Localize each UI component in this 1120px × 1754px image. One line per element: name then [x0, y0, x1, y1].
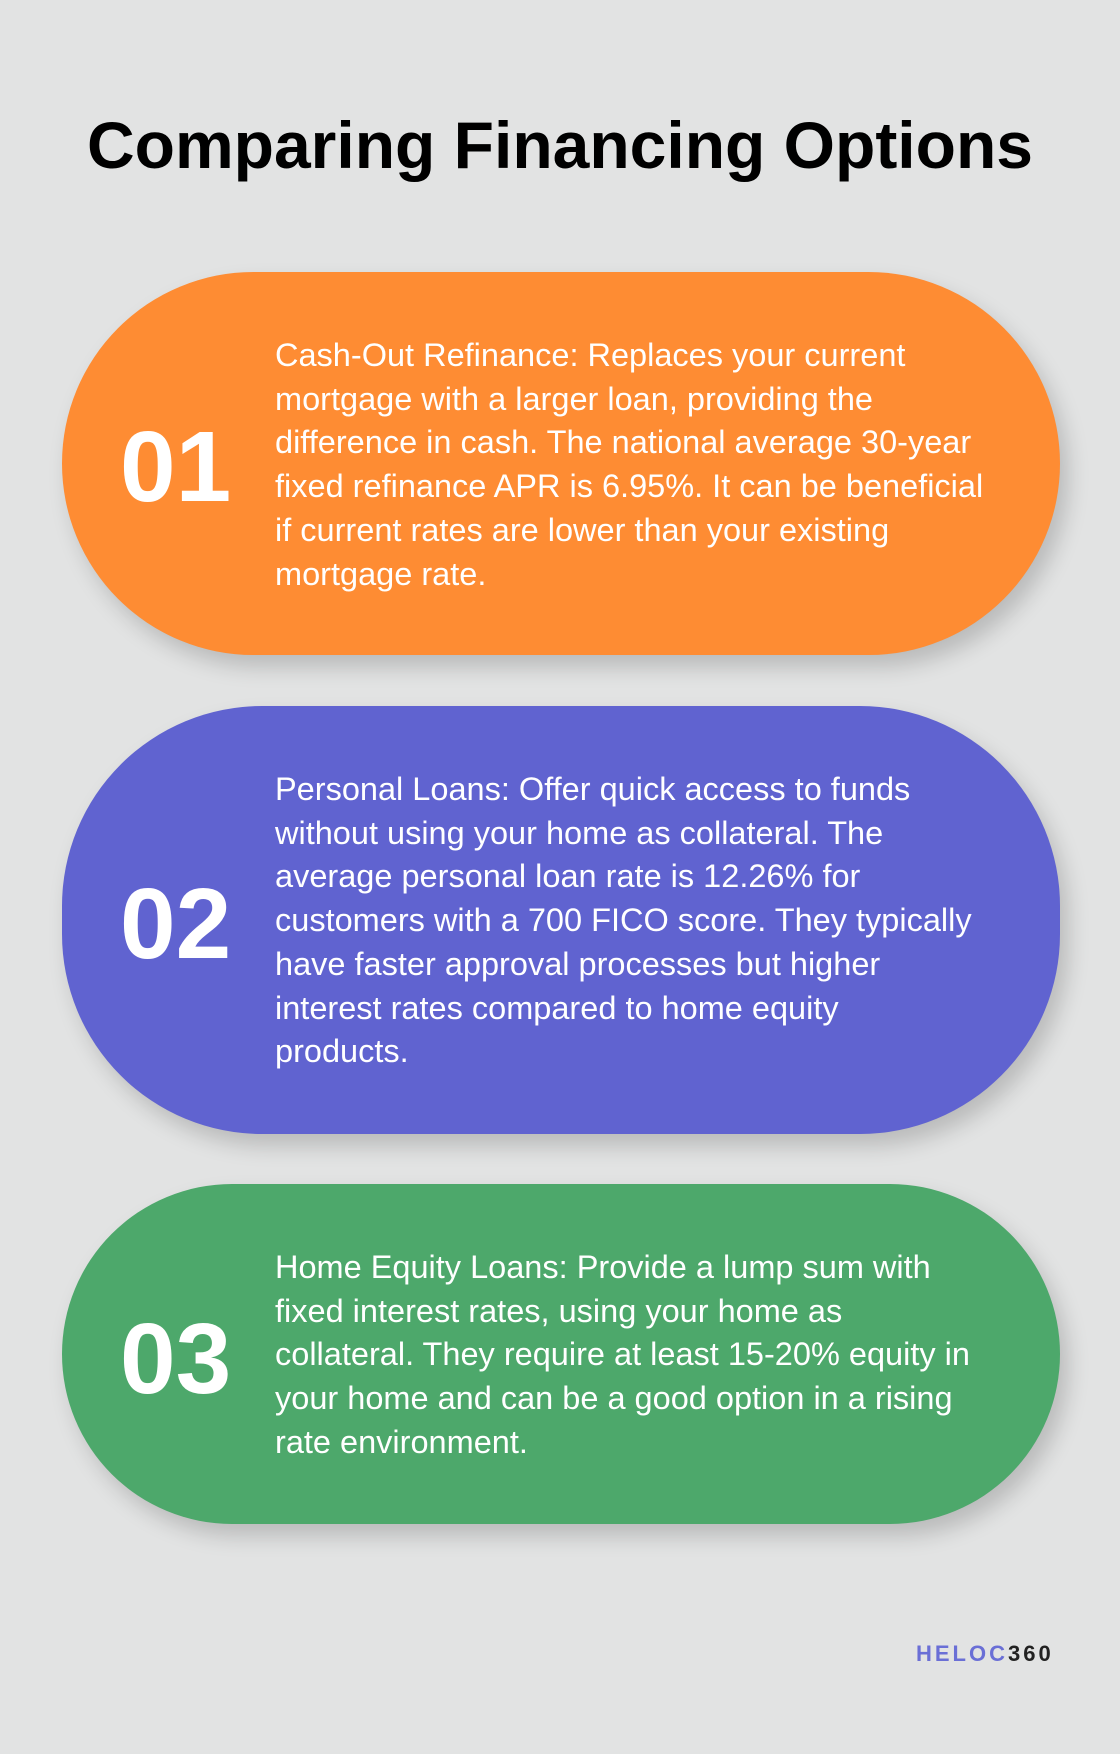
number 01: 01 — [120, 411, 231, 523]
text: cash-out refinance: mortgage with a larger loan, providing the — [275, 381, 873, 417]
panel: home equity loans — [62, 1184, 1060, 1524]
text: personal loans: Personal Loans: Offer quick access to funds — [275, 771, 910, 807]
number 03: 03 — [120, 1303, 231, 1415]
text: personal loans: customers with a 700 FICO score. They typically — [275, 902, 972, 938]
text: cash-out refinance: Cash-Out Refinance: Replaces your current — [275, 337, 905, 373]
text: personal loans: average personal loan rate is 12.26% for — [275, 858, 860, 894]
text: personal loans: without using your home as collateral. The — [275, 815, 883, 851]
text: personal loans: products. — [275, 1033, 409, 1069]
text: home equity loans: your home and can be a good option in a rising — [275, 1380, 953, 1416]
logo: HELOC360 — [916, 1641, 1054, 1666]
text: personal loans — [275, 771, 972, 1069]
text: home equity loans: Home Equity Loans: Provide a lump sum with — [275, 1249, 931, 1285]
title: Comparing Financing Options — [87, 108, 1033, 182]
text: cash-out refinance — [275, 337, 983, 592]
panel: personal loans — [62, 706, 1060, 1134]
text: home equity loans: collateral. They require at least 15-20% equity in — [275, 1336, 970, 1372]
text: home equity loans: fixed interest rates, using your home as — [275, 1293, 842, 1329]
text: cash-out refinance: if current rates are lower than your existing — [275, 512, 889, 548]
text: cash-out refinance: fixed refinance APR is 6.95%. It can be beneficial — [275, 468, 983, 504]
number 02: 02 — [120, 868, 231, 980]
text: home equity loans: rate environment. — [275, 1424, 528, 1460]
text: personal loans: have faster approval processes but higher — [275, 946, 880, 982]
text: personal loans: interest rates compared to home equity — [275, 990, 839, 1026]
panel: cash-out refinance — [62, 272, 1060, 655]
text: cash-out refinance: mortgage rate. — [275, 556, 486, 592]
text: cash-out refinance: difference in cash. The national average 30-year — [275, 424, 971, 460]
text: home equity loans — [275, 1249, 970, 1460]
